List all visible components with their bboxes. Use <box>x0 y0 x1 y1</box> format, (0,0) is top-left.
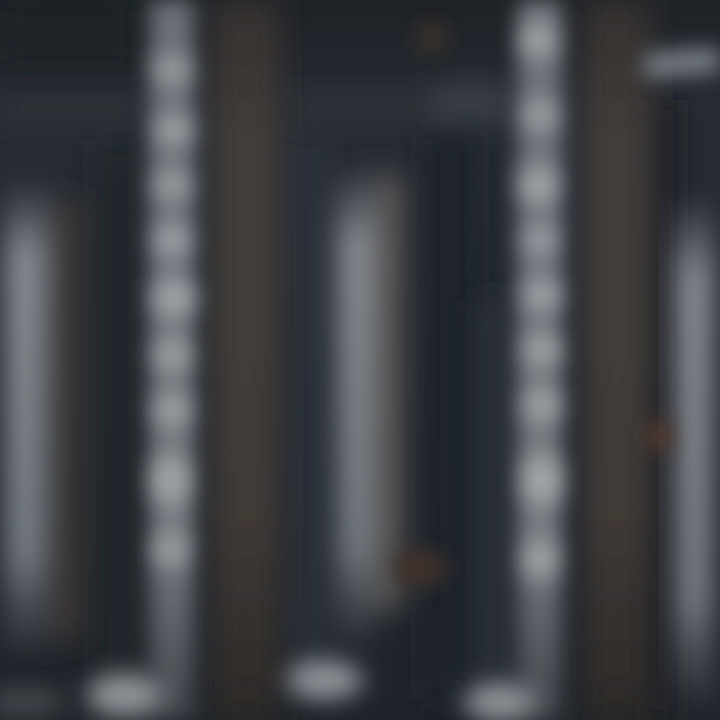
central light column <box>338 170 402 645</box>
brown column 1 <box>212 0 280 720</box>
left light column <box>6 185 82 650</box>
horizontal beam <box>0 85 510 125</box>
brown column 2 <box>584 0 650 720</box>
bright beaded column 2 <box>518 0 562 720</box>
top right highlight <box>643 47 720 79</box>
floor reflections <box>0 660 536 720</box>
warm accent spots <box>392 24 672 586</box>
bright beaded column 1 <box>150 0 195 720</box>
right light column <box>676 200 712 705</box>
